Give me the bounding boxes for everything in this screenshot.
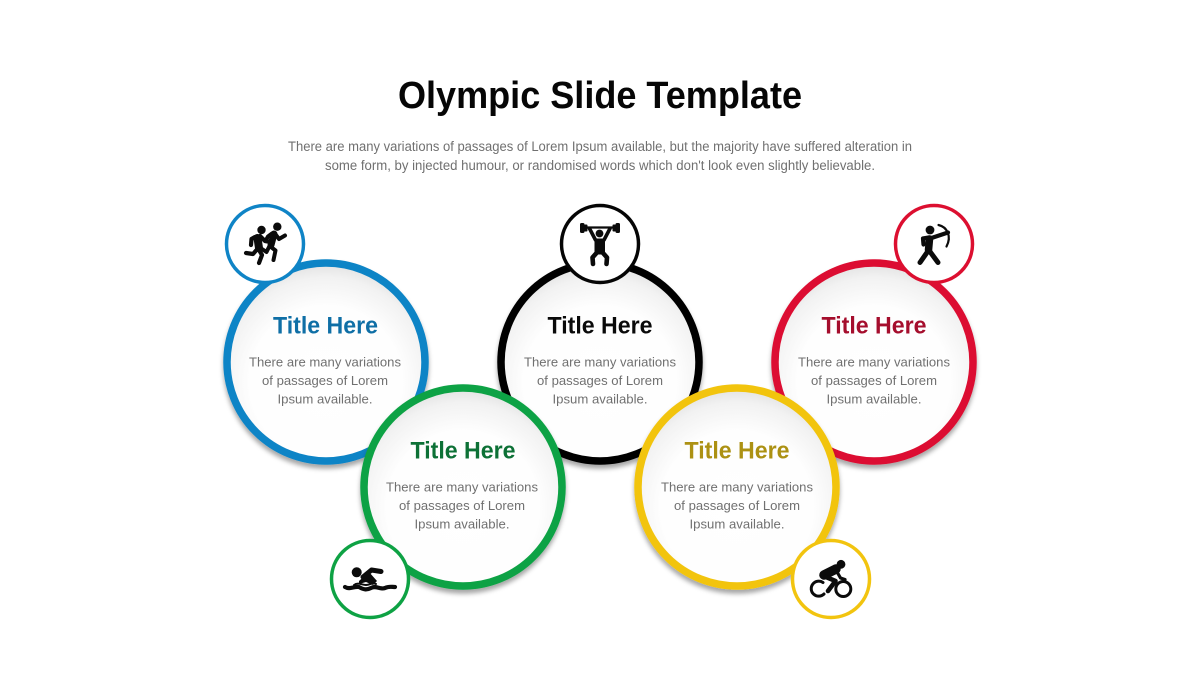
yellow body text bbox=[661, 480, 813, 532]
red body text: Ipsum available. bbox=[826, 392, 922, 406]
green body text bbox=[386, 480, 538, 532]
green heading: Title Here bbox=[410, 438, 516, 464]
green body text: Ipsum available. bbox=[414, 516, 510, 532]
icon: cyclist bbox=[792, 540, 870, 618]
icon: weightlifter bbox=[562, 206, 638, 282]
black body text bbox=[524, 354, 676, 406]
red body text bbox=[798, 354, 950, 406]
panel: black circle bbox=[501, 263, 699, 461]
black body text: of passages of Lorem bbox=[537, 373, 663, 388]
icon: runners bbox=[226, 206, 304, 282]
icon: archer bbox=[896, 206, 972, 282]
black heading: Title Here bbox=[548, 312, 652, 340]
green body text: There are many variations bbox=[386, 480, 538, 494]
red body text: There are many variations bbox=[798, 354, 950, 370]
blue body text bbox=[249, 354, 401, 406]
subtitle text: some form, by injected humour, or randomised words which don't look even slightly believable. bbox=[325, 158, 875, 173]
red heading: Title Here bbox=[822, 312, 926, 340]
panel: yellow circle bbox=[638, 388, 836, 586]
subtitle text: There are many variations of passages of Lorem Ipsum available, but the majority have suffered alteration in bbox=[288, 139, 912, 154]
blue body text: Ipsum available. bbox=[278, 392, 372, 406]
subtitle text bbox=[288, 139, 912, 173]
yellow body text: There are many variations bbox=[661, 480, 813, 494]
yellow body text: of passages of Lorem bbox=[674, 498, 800, 513]
icon: swimmer bbox=[332, 540, 408, 618]
panel: green circle bbox=[364, 388, 562, 586]
green body text: of passages of Lorem bbox=[399, 498, 525, 513]
panel: blue circle bbox=[227, 263, 425, 461]
yellow body text: Ipsum available. bbox=[690, 516, 784, 532]
yellow heading: Title Here bbox=[684, 438, 790, 464]
black body text: There are many variations bbox=[524, 354, 676, 370]
black body text: Ipsum available. bbox=[552, 392, 648, 406]
blue body text: There are many variations bbox=[249, 354, 401, 370]
red body text: of passages of Lorem bbox=[811, 373, 937, 388]
blue body text: of passages of Lorem bbox=[262, 373, 388, 388]
blue heading: Title Here bbox=[273, 312, 378, 340]
title: Olympic Slide Template bbox=[398, 75, 802, 117]
panel: red circle bbox=[775, 263, 973, 461]
